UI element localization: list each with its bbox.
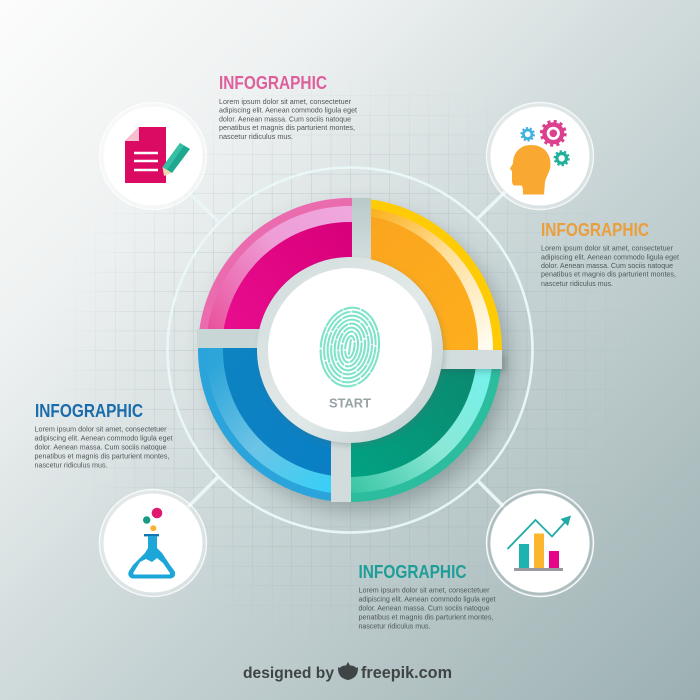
text block: blue: INFOGRAPHIC [35, 401, 143, 421]
footer credit: designed by [243, 665, 334, 682]
text block: green: nascetur ridiculus mus. [358, 621, 431, 630]
outer ring [168, 168, 532, 532]
text block: orange: Lorem ipsum dolor sit amet, consectetuer [541, 244, 674, 253]
text block: pink: Lorem ipsum dolor sit amet, consectetuer [219, 97, 352, 106]
segment: blue [198, 348, 331, 501]
icon circle: head with gears [486, 102, 594, 210]
text block: pink [219, 73, 357, 141]
text block: green: INFOGRAPHIC [358, 562, 467, 582]
icon circle: document [100, 102, 206, 210]
icon circle: flask [100, 490, 206, 596]
text block: pink: penatibus et magnis dis parturient montes, [219, 123, 355, 132]
icon: freepik logo [338, 662, 358, 680]
icon: flask [128, 508, 175, 578]
text block: orange: dolor. Aenean massa. Cum sociis natoque [541, 261, 673, 270]
segment: orange [371, 200, 502, 350]
text block: orange: penatibus et magnis dis parturient montes, [541, 270, 676, 279]
text block: green: Lorem ipsum dolor sit amet, consectetuer [358, 586, 490, 595]
text block: green: adipiscing elit. Aenean commodo ligula eget [358, 595, 496, 604]
text block: green [358, 562, 496, 630]
icon: teal gear [555, 151, 569, 165]
text block: orange: nascetur ridiculus mus. [541, 279, 613, 288]
text block: blue: adipiscing elit. Aenean commodo ligula eget [34, 434, 172, 443]
text block: orange: adipiscing elit. Aenean commodo ligula eget [541, 252, 679, 261]
icon: fingerprint [316, 304, 384, 390]
text block: pink: nascetur ridiculus mus. [219, 132, 293, 141]
connector lines [188, 192, 505, 508]
start label: START [329, 396, 371, 410]
text block: pink: adipiscing elit. Aenean commodo ligula eget [219, 106, 357, 115]
background grid [81, 92, 592, 604]
text block: green: penatibus et magnis dis parturient montes, [358, 612, 494, 621]
icon circle: chart [486, 490, 594, 596]
segment: green [351, 369, 501, 502]
text block: blue: Lorem ipsum dolor sit amet, consectetuer [34, 425, 167, 434]
text block: green: dolor. Aenean massa. Cum sociis natoque [358, 603, 490, 612]
ring shadow [259, 260, 445, 446]
text block: blue: dolor. Aenean massa. Cum sociis natoque [34, 443, 166, 452]
donut chart [197, 198, 508, 510]
spoke shadow [440, 354, 506, 372]
text block: blue [34, 401, 172, 470]
footer credit [243, 662, 452, 682]
text block: blue: penatibus et magnis dis parturient montes, [34, 451, 170, 460]
icon: document and pencil [125, 127, 190, 183]
spokes [197, 198, 502, 502]
segment: pink [200, 198, 352, 329]
donut shadow [208, 210, 508, 510]
text block: blue: nascetur ridiculus mus. [34, 461, 108, 470]
centre disc [268, 268, 432, 432]
grey ring [257, 257, 443, 443]
icon: pink gear [541, 121, 565, 145]
text block: orange: INFOGRAPHIC [541, 220, 649, 240]
text block: orange [541, 220, 679, 288]
footer credit: freepik.com [361, 664, 452, 682]
text block: pink: INFOGRAPHIC [219, 73, 327, 93]
icon: head [510, 145, 550, 194]
text block: pink: dolor. Aenean massa. Cum sociis natoque [219, 114, 351, 123]
icon: blue gear [521, 128, 534, 141]
icon: bar chart [508, 516, 571, 571]
